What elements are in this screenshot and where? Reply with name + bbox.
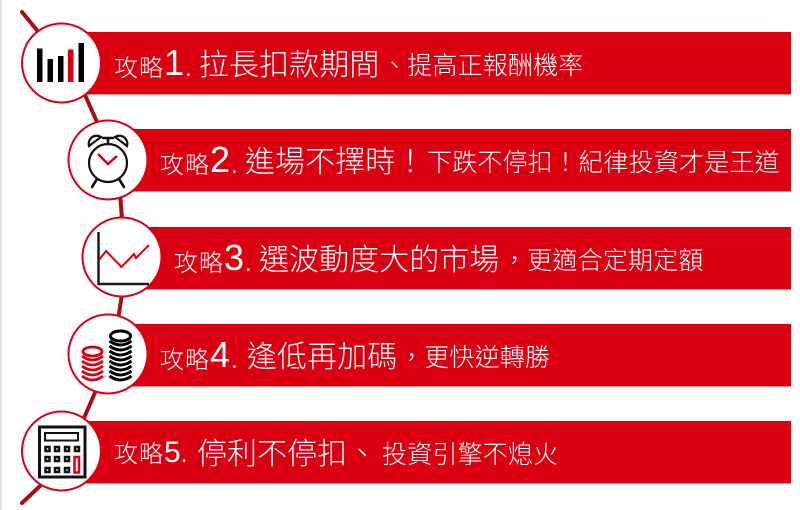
text: strategy 1 heading: 1 bbox=[164, 42, 184, 83]
icon: coin stacks in circle bbox=[68, 314, 148, 394]
text: strategy 4 subtitle: ，更快逆轉勝 bbox=[399, 344, 550, 372]
icon: line chart in circle bbox=[82, 218, 162, 296]
text: strategy 3 heading: 3 bbox=[224, 237, 244, 278]
panel: strategy 2 bar bbox=[130, 129, 791, 191]
text: strategy 5 main title: 停利不停扣、 bbox=[197, 438, 377, 471]
icon: alarm clock in circle bbox=[68, 120, 148, 200]
text: strategy 1 subtitle: 、提高正報酬機率 bbox=[382, 52, 584, 80]
text: strategy 3 main title: 選波動度大的市場 bbox=[259, 244, 499, 277]
connector line bbox=[22, 12, 122, 503]
text: strategy 2 main title: 進場不擇時！ bbox=[245, 146, 425, 179]
text: strategy 3 heading bbox=[174, 237, 253, 278]
text: strategy 5 heading: 攻略5. bbox=[114, 436, 188, 469]
icon: calculator in circle bbox=[22, 412, 101, 490]
panel: strategy 3 bar bbox=[140, 227, 791, 289]
panel: strategy 4 bar bbox=[130, 324, 791, 386]
panel: strategy 1 bar bbox=[80, 32, 791, 94]
text: strategy 2 heading: 攻略 . bbox=[160, 152, 239, 179]
text: strategy 4 main title: 逢低再加碼 bbox=[247, 341, 397, 374]
text: strategy 4 heading: 4 bbox=[210, 334, 230, 375]
text: strategy 2 heading bbox=[160, 139, 239, 180]
text: strategy 2 heading: 2 bbox=[210, 139, 230, 180]
text: strategy 2 subtitle: 下跌不停扣！紀律投資才是王道 bbox=[427, 149, 780, 177]
text: strategy 3 subtitle: ，更適合定期定額 bbox=[502, 247, 704, 275]
text: strategy 3 heading: 攻略 . bbox=[174, 250, 253, 277]
panel: strategy 5 bar bbox=[80, 421, 791, 483]
text: strategy 1 heading bbox=[114, 42, 193, 83]
text: strategy 4 heading bbox=[160, 334, 239, 375]
text: strategy 1 main title: 拉長扣款期間 bbox=[199, 49, 379, 82]
text: strategy 5 subtitle: 投資引擎不熄火 bbox=[382, 441, 558, 469]
text: strategy 1 heading: 攻略 . bbox=[114, 55, 193, 82]
text: strategy 4 heading: 攻略 . bbox=[160, 347, 239, 374]
icon: bar chart in circle bbox=[22, 24, 101, 102]
